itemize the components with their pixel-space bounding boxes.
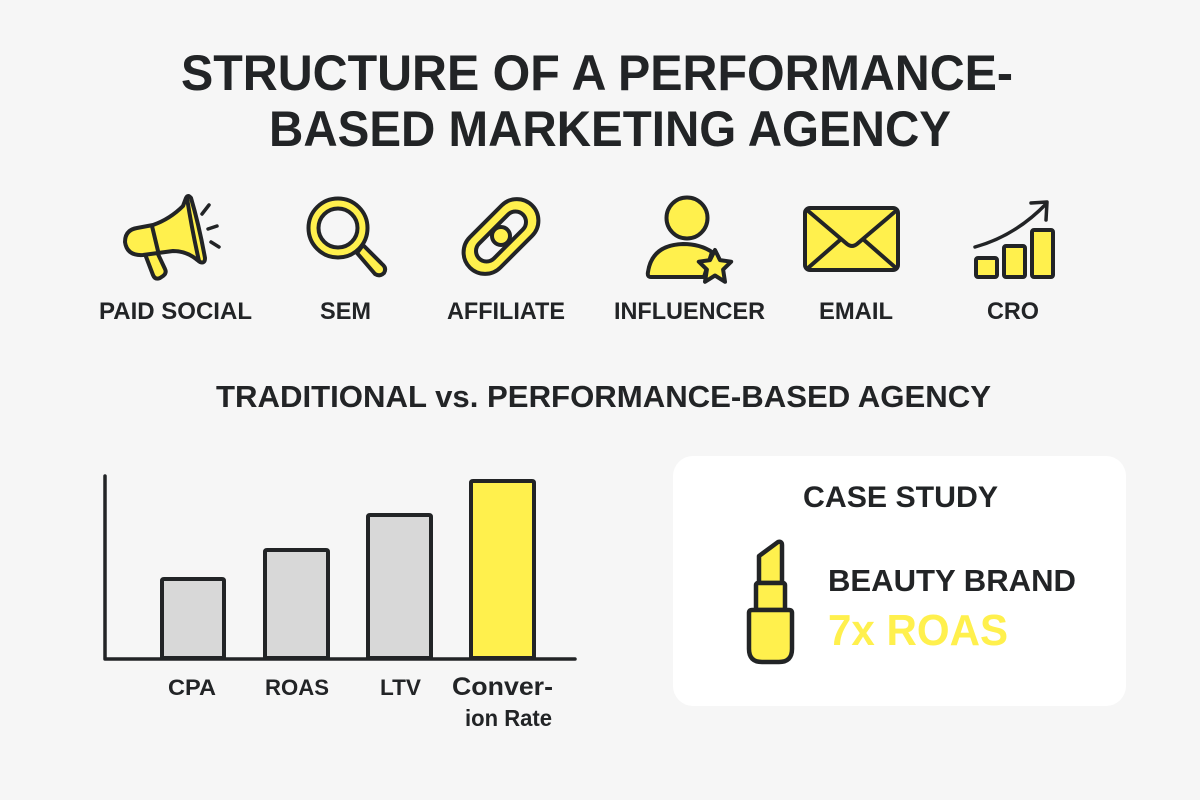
axes bbox=[105, 476, 575, 659]
icon labels: EMAIL bbox=[819, 298, 893, 325]
icon: chain link, affiliate bbox=[455, 190, 547, 283]
title: BASED MARKETING AGENCY bbox=[269, 101, 951, 157]
icon: megaphone, paid social bbox=[125, 196, 219, 279]
bar chart bbox=[105, 476, 575, 731]
icon labels bbox=[99, 298, 1039, 325]
icon: lipstick bbox=[749, 542, 792, 662]
axis labels bbox=[168, 673, 553, 731]
brand name: BEAUTY BRAND bbox=[828, 563, 1076, 598]
icon: rising bars, CRO bbox=[975, 202, 1053, 277]
icon labels: PAID SOCIAL bbox=[99, 298, 252, 325]
case study heading: CASE STUDY bbox=[803, 481, 998, 514]
title bbox=[181, 45, 1013, 157]
icon: envelope, email bbox=[805, 208, 898, 270]
icon labels: SEM bbox=[320, 298, 371, 325]
icon labels: AFFILIATE bbox=[447, 298, 565, 325]
axis labels: ROAS bbox=[265, 675, 329, 700]
icon labels: CRO bbox=[987, 298, 1039, 325]
panel: case study bbox=[673, 456, 1126, 706]
icon labels: INFLUENCER bbox=[614, 298, 765, 325]
icon row: marketing channels bbox=[125, 190, 1053, 283]
axis labels: Conver- bbox=[452, 673, 553, 701]
title: STRUCTURE OF A PERFORMANCE- bbox=[181, 45, 1013, 101]
result: 7x ROAS: 7x ROAS bbox=[828, 606, 1008, 655]
icon: magnifying glass, SEM bbox=[308, 198, 385, 275]
axis labels: LTV bbox=[380, 675, 421, 700]
bars bbox=[162, 481, 534, 658]
axis labels: ion Rate bbox=[465, 705, 552, 731]
section heading: TRADITIONAL vs. PERFORMANCE-BASED AGENCY bbox=[216, 379, 991, 414]
axis labels: CPA bbox=[168, 675, 216, 700]
icon: person with star, influencer bbox=[648, 198, 731, 282]
